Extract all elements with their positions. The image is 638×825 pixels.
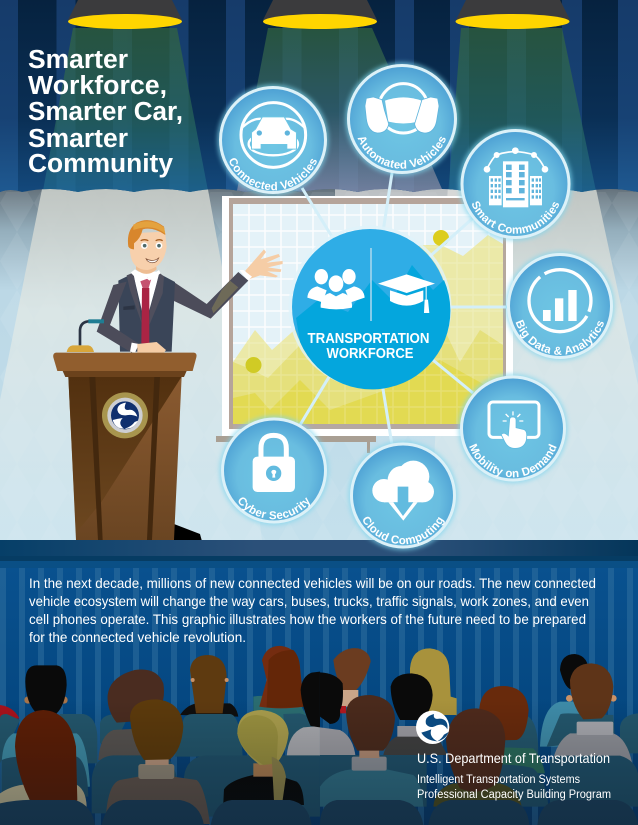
icon: steering wheel and hands — [365, 84, 439, 133]
central hub: transportation workforce — [290, 227, 450, 389]
hub label: WORKFORCE — [326, 346, 414, 362]
audience right half — [320, 648, 638, 825]
icon: cloud download — [372, 461, 434, 521]
front row seats — [320, 800, 638, 825]
body paragraph: for the connected vehicle revolution. — [29, 629, 246, 645]
program name: Professional Capacity Building Program — [417, 789, 611, 801]
title: Smarter — [28, 125, 128, 153]
audience wall — [0, 568, 638, 825]
node: cloud computing — [346, 438, 460, 553]
usdot department name: U.S. Department of Transportation — [417, 750, 610, 766]
icon: people — [307, 269, 365, 309]
stage floor — [0, 540, 638, 569]
icon: tablet with pointer — [489, 402, 539, 448]
front row people — [320, 695, 522, 807]
label: big data and analytics: Big Data & Analytics — [516, 320, 604, 355]
title: Smarter Car, — [28, 98, 183, 126]
title: Workforce, — [28, 72, 167, 100]
node: connected vehicles — [214, 82, 332, 198]
lamp 3 — [456, 0, 570, 29]
label: cyber security: Cyber Security — [238, 497, 310, 520]
middle row bodies — [2, 669, 320, 793]
body paragraph: In the next decade, millions of new connected vehicles will be on our roads. The new connected — [29, 575, 596, 591]
spotlight beams on backdrop — [0, 184, 638, 541]
middle row seats — [2, 755, 320, 817]
icon: graduation cap — [378, 274, 435, 313]
connector lines — [300, 173, 507, 445]
icon: bar chart ring — [529, 270, 591, 332]
presenter head — [128, 220, 167, 282]
back row heads — [333, 648, 638, 753]
node: smart communities — [456, 124, 575, 244]
spotlight beams on curtain — [42, 28, 597, 196]
podium — [53, 353, 202, 540]
lamp 1 — [68, 0, 182, 29]
node: automated vehicles — [342, 60, 462, 178]
label: mobility on demand: Mobility on Demand — [469, 444, 557, 478]
label: connected vehicles: Connected Vehicles — [230, 158, 317, 190]
back row heads — [24, 646, 312, 727]
icon: car — [241, 103, 306, 167]
title: Smarter — [28, 46, 128, 74]
podium seal — [102, 392, 148, 438]
label: automated vehicles: Automated Vehicles — [358, 136, 446, 169]
program name: Intelligent Transportation Systems — [417, 774, 580, 786]
back row seats — [0, 713, 313, 763]
microphone — [67, 319, 104, 352]
node: cyber security — [217, 413, 331, 528]
lamp 2 — [263, 0, 377, 29]
curtain background — [0, 0, 638, 196]
title: Community — [28, 150, 174, 178]
body paragraph: vehicle ecosystem will change the way cars, buses, trucks, traffic signals, work zones, and even — [29, 593, 589, 609]
chart mountains — [233, 235, 503, 424]
label: cloud computing: Cloud Computing — [363, 516, 445, 544]
usdot logo — [416, 711, 449, 744]
audience left half — [0, 646, 320, 825]
front row seats — [0, 800, 312, 825]
node: big data and analytics — [502, 249, 617, 363]
middle row people — [320, 663, 635, 783]
icon: padlock — [253, 435, 295, 492]
hub label: TRANSPORTATION — [307, 331, 429, 347]
bottom shade overlay — [0, 700, 638, 825]
front row people — [0, 699, 304, 824]
presentation board with chart — [216, 196, 513, 453]
label: smart communities: Smart Communities — [472, 201, 559, 234]
presenter — [97, 220, 283, 353]
body paragraph: cell phones operate. This graphic illustrates how the workers of the future need to be prepared — [29, 611, 586, 627]
icon: buildings with network arc — [484, 147, 548, 207]
node: mobility on demand — [456, 371, 570, 486]
middle row seats — [320, 755, 638, 807]
stage backdrop — [0, 184, 638, 541]
presenter torso — [97, 272, 175, 353]
presenter raised arm and hand — [173, 249, 283, 319]
